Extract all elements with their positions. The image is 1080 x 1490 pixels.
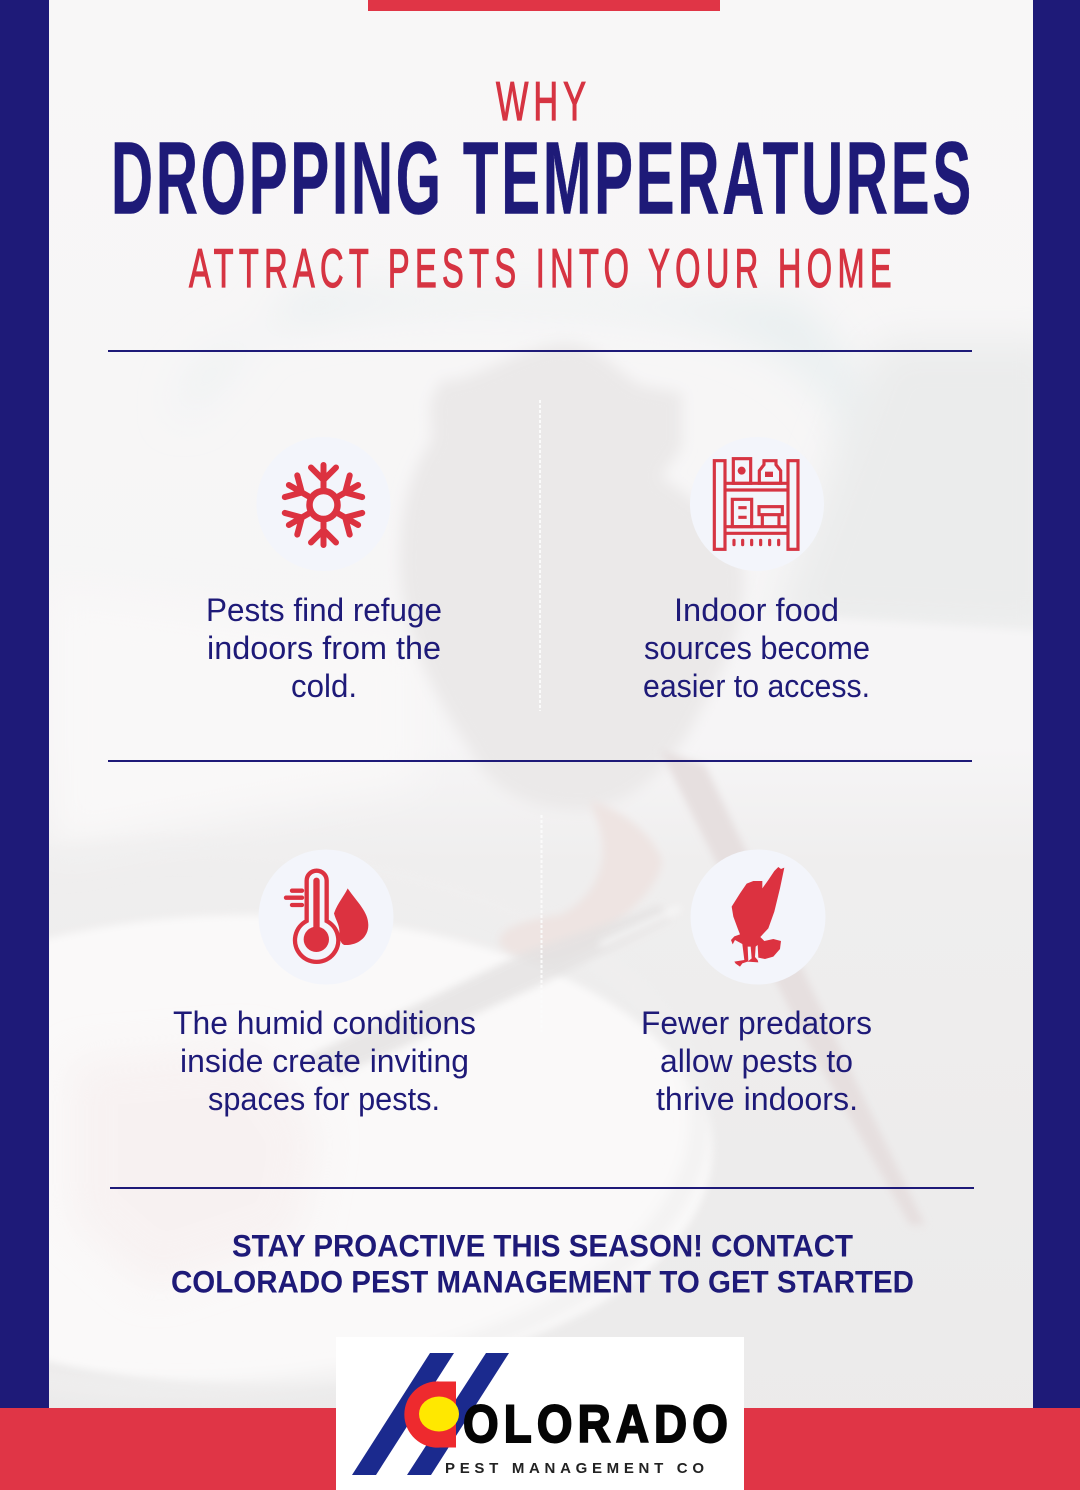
logo: Colorado Pest Management Co: OLORADO xyxy=(463,1395,733,1454)
text: humid: The humid conditions xyxy=(173,1005,476,1041)
text: predators: thrive indoors. xyxy=(656,1081,858,1117)
top red tab xyxy=(368,0,720,11)
text: food xyxy=(643,592,870,704)
right navy border xyxy=(1033,0,1080,1490)
call to action xyxy=(171,1228,914,1300)
panel: indoor food xyxy=(643,437,870,704)
text: refuge: cold. xyxy=(291,668,357,704)
icon: thermometer and drop xyxy=(258,850,394,984)
text: predators: Fewer predators xyxy=(641,1005,872,1041)
left navy border xyxy=(0,0,49,1490)
panel: fewer predators xyxy=(641,850,872,1117)
icon: pantry shelf xyxy=(690,437,824,571)
text: food: Indoor food xyxy=(674,592,839,628)
bottom red band xyxy=(0,1408,1080,1490)
logo: Colorado Pest Management Co: PEST MANAGEMENT CO xyxy=(445,1460,707,1477)
text: predators xyxy=(641,1005,872,1117)
panel: humid conditions xyxy=(173,850,476,1117)
title line: why: WHY xyxy=(496,70,591,132)
text: refuge: Pests find refuge xyxy=(206,592,442,628)
text: humid xyxy=(173,1005,476,1117)
call to action: COLORADO PEST MANAGEMENT TO GET STARTED xyxy=(171,1264,914,1300)
text: refuge xyxy=(206,592,442,704)
icon: snowflake xyxy=(256,437,390,571)
text: humid: inside create inviting xyxy=(180,1043,469,1079)
logo: Colorado Pest Management Co xyxy=(336,1337,744,1490)
panel: refuge from the cold xyxy=(206,437,442,704)
title xyxy=(111,70,974,299)
text: food: sources become xyxy=(644,630,870,666)
text: humid: spaces for pests. xyxy=(208,1081,440,1117)
text: predators: allow pests to xyxy=(660,1043,853,1079)
call to action: STAY PROACTIVE THIS SEASON! CONTACT xyxy=(232,1228,853,1264)
icon: hawk xyxy=(690,850,826,984)
text: food: easier to access. xyxy=(643,668,870,704)
text: refuge: indoors from the xyxy=(207,630,441,666)
